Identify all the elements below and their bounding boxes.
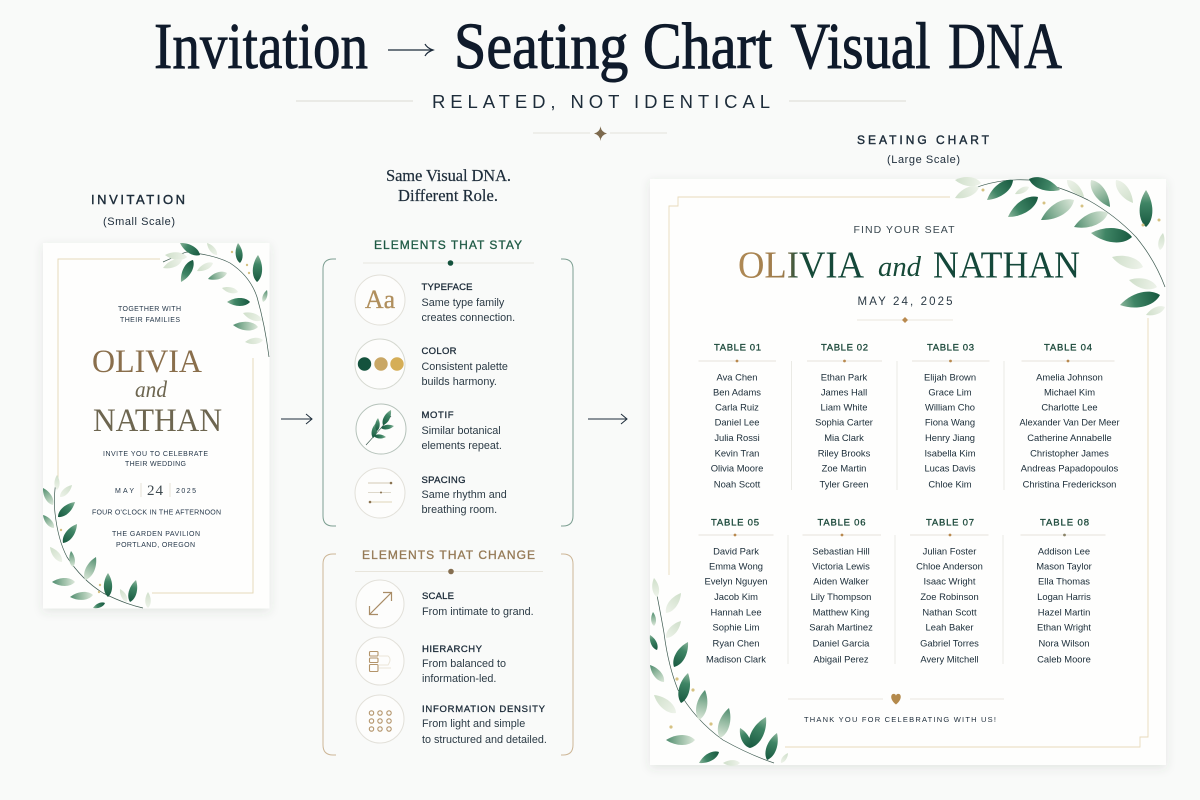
table 01: TABLE 01 — [714, 342, 761, 354]
text: typeface: creates connection. — [422, 312, 515, 324]
text: spacing: SPACING — [422, 475, 466, 486]
text: color: builds harmony. — [422, 376, 497, 388]
names: Olivia and Nathan: and — [878, 252, 922, 283]
table 07: Isaac Wright — [924, 575, 976, 586]
table 08 — [1020, 518, 1106, 664]
table 04 — [1020, 342, 1120, 489]
table 03 — [912, 342, 990, 489]
invitation text: OLIVIA — [92, 344, 202, 380]
table 01: Ava Chen — [716, 371, 758, 382]
text: motif — [422, 410, 502, 452]
text: hierarchy: From balanced to — [422, 658, 506, 670]
invitation text: NATHAN — [93, 403, 222, 439]
invitation text: PORTLAND, OREGON — [116, 542, 195, 549]
heading: elements that stay: ELEMENTS THAT STAY — [374, 238, 522, 252]
table 08: Nora Wilson — [1038, 637, 1090, 648]
title: Visual — [790, 10, 930, 83]
bracket — [323, 259, 573, 526]
icon: scale — [356, 580, 404, 628]
table 01 — [698, 342, 776, 489]
title: Seating Chart — [454, 10, 772, 83]
table 02: Liam White — [821, 401, 867, 412]
table 05: Jacob Kim — [714, 591, 758, 602]
heading: seating chart — [857, 133, 990, 166]
panel: elements that change — [323, 548, 573, 755]
table 02: Tyler Green — [820, 478, 868, 489]
table 06: TABLE 06 — [818, 518, 866, 528]
table 07: Chloe Anderson — [916, 560, 983, 571]
table 05: David Park — [713, 545, 759, 556]
table 02: Sophia Carter — [815, 416, 873, 427]
heading: seating chart: (Large Scale) — [887, 154, 960, 166]
invitation text: and — [135, 377, 167, 402]
icon: heart divider — [788, 694, 1004, 704]
arrow: invitation to center — [281, 414, 312, 424]
title: DNA — [948, 10, 1062, 83]
table 04: Amelia Johnson — [1036, 371, 1103, 382]
invitation text: INVITE YOU TO CELEBRATE — [103, 451, 208, 458]
table 02: Zoe Martin — [822, 462, 866, 473]
table 02: Riley Brooks — [818, 447, 871, 458]
text: hierarchy: HIERARCHY — [422, 644, 483, 655]
botanical corner: top right — [950, 174, 1166, 318]
heading: find your seat: FIND YOUR SEAT — [854, 224, 955, 236]
text: color: Consistent palette — [422, 361, 508, 373]
table 02: TABLE 02 — [821, 342, 868, 354]
text: information density: to structured and detailed. — [422, 734, 547, 746]
table 04: Christina Frederickson — [1023, 478, 1116, 489]
text: spacing: breathing room. — [422, 504, 497, 516]
panel: elements that stay — [323, 238, 573, 526]
table 04: Michael Kim — [1044, 386, 1095, 397]
ornament: star divider — [533, 126, 667, 141]
icon: motif — [356, 404, 406, 454]
text: scale: SCALE — [422, 591, 454, 602]
title: Invitation — [154, 10, 368, 83]
table 05: Emma Wong — [709, 560, 763, 571]
table 06: Victoria Lewis — [812, 560, 870, 571]
table 06: Sebastian Hill — [812, 545, 870, 556]
table 05: Sophie Lim — [713, 621, 760, 632]
text: information density — [422, 704, 547, 746]
text: motif: elements repeat. — [422, 440, 502, 452]
table 04: Catherine Annabelle — [1027, 432, 1112, 443]
panel: invitation card — [40, 240, 269, 610]
table 03: Elijah Brown — [924, 371, 976, 382]
table 05: Ryan Chen — [713, 637, 759, 648]
table 02: Mia Clark — [824, 432, 864, 443]
invitation text: MAY — [115, 488, 134, 495]
invitation text: THEIR FAMILIES — [120, 317, 180, 324]
text: typeface — [422, 282, 515, 324]
table 01: Kevin Tran — [715, 447, 759, 458]
table 06: Daniel Garcia — [813, 637, 870, 648]
names: Olivia and Nathan: OLIVIA — [738, 245, 865, 287]
table 08: Ella Thomas — [1038, 575, 1090, 586]
table 01: Julia Rossi — [714, 432, 760, 443]
table 08: TABLE 08 — [1040, 518, 1089, 528]
invitation text: FOUR O'CLOCK IN THE AFTERNOON — [92, 510, 221, 516]
icon: typeface: Aa — [365, 285, 396, 314]
table 08: Hazel Martin — [1038, 606, 1090, 617]
invitation text: 24 — [147, 483, 164, 499]
text: typeface: Same type family — [422, 297, 505, 309]
heading: invitation: INVITATION — [91, 192, 185, 207]
table 03: Isabella Kim — [924, 447, 976, 458]
table 02: James Hall — [821, 386, 867, 397]
table 06: Lily Thompson — [811, 591, 871, 602]
text: hierarchy — [422, 644, 506, 685]
text: information density: INFORMATION DENSITY — [422, 704, 546, 715]
table 06: Matthew King — [813, 606, 869, 617]
arrow: center to seating chart — [588, 414, 627, 424]
table 01: Ben Adams — [713, 386, 761, 397]
heading: invitation — [91, 192, 185, 228]
icon: color — [355, 339, 405, 389]
table 06: Sarah Martinez — [809, 621, 873, 632]
invitation text: THE GARDEN PAVILION — [112, 531, 200, 538]
botanical corner: top right — [160, 240, 270, 358]
table 01: Olivia Moore — [711, 462, 763, 473]
table 07: Zoe Robinson — [920, 591, 979, 602]
table 05: Madison Clark — [706, 653, 766, 664]
text: spacing — [422, 475, 507, 516]
botanical corner: bottom left — [647, 575, 790, 766]
table 08: Addison Lee — [1038, 545, 1090, 556]
text: motif: Similar botanical — [422, 425, 501, 437]
icon: typeface — [355, 275, 405, 325]
table 07: TABLE 07 — [926, 518, 974, 528]
table 05: TABLE 05 — [711, 518, 759, 528]
table 07: Nathan Scott — [922, 606, 977, 617]
table 01: Carla Ruiz — [715, 401, 759, 412]
heading: same visual DNA — [386, 166, 511, 205]
table 06 — [802, 518, 881, 664]
table 01: Noah Scott — [714, 478, 761, 489]
table 02 — [807, 342, 882, 489]
names: Olivia and Nathan: NATHAN — [933, 245, 1080, 287]
table 05: Hannah Lee — [710, 606, 762, 617]
invitation text: THEIR WEDDING — [125, 461, 186, 468]
table 04: Charlotte Lee — [1041, 401, 1098, 412]
table 07 — [910, 518, 988, 664]
date — [857, 296, 953, 323]
table 07: Leah Baker — [926, 621, 973, 632]
table 03: Grace Lim — [928, 386, 972, 397]
date: MAY 24, 2025 — [858, 296, 952, 308]
text: typeface: TYPEFACE — [422, 282, 472, 293]
table 03: William Cho — [925, 401, 975, 412]
icon: information density — [356, 695, 404, 743]
icon: hierarchy — [356, 637, 404, 685]
text: scale — [422, 591, 534, 618]
table 04: TABLE 04 — [1044, 342, 1092, 354]
table 07: Avery Mitchell — [920, 653, 979, 664]
table 08: Logan Harris — [1037, 591, 1091, 602]
table 05: Evelyn Nguyen — [704, 575, 768, 586]
table 03: Chloe Kim — [928, 478, 972, 489]
text: hierarchy: information-led. — [422, 673, 496, 685]
invitation text — [92, 306, 222, 549]
heading: seating chart: SEATING CHART — [857, 133, 990, 147]
heading: same visual DNA: Same Visual DNA. — [386, 166, 511, 185]
table 06: Abigail Perez — [813, 653, 869, 664]
table 03: Lucas Davis — [924, 462, 976, 473]
text: color — [422, 346, 508, 388]
subtitle: RELATED, NOT IDENTICAL — [432, 91, 770, 112]
table 07: Julian Foster — [923, 545, 976, 556]
text: spacing: Same rhythm and — [422, 489, 507, 501]
table 08: Mason Taylor — [1036, 560, 1092, 571]
botanical corner: bottom left — [40, 475, 152, 610]
names: Olivia and Nathan — [738, 245, 1080, 287]
table 03: Henry Jiang — [925, 432, 975, 443]
table 01: Daniel Lee — [715, 416, 759, 427]
table 05 — [698, 518, 774, 664]
text: color: COLOR — [422, 346, 457, 357]
title — [154, 10, 1062, 83]
table 04: Alexander Van Der Meer — [1020, 416, 1120, 427]
invitation gold frame — [58, 259, 253, 593]
seating chart gold frame — [669, 197, 1148, 747]
table 02: Ethan Park — [821, 371, 867, 382]
table 08: Caleb Moore — [1037, 653, 1091, 664]
text: motif: MOTIF — [422, 410, 454, 421]
bracket — [323, 554, 573, 755]
panel: seating chart card — [647, 174, 1166, 766]
icon: spacing — [355, 468, 405, 518]
heading: elements that change: ELEMENTS THAT CHANGE — [362, 548, 535, 562]
text: information density: From light and simple — [422, 718, 525, 730]
table 06: Aiden Walker — [813, 575, 869, 586]
invitation text: 2025 — [176, 488, 196, 495]
text: thank you: THANK YOU FOR CELEBRATING WITH US! — [804, 715, 996, 724]
heading: invitation: (Small Scale) — [103, 216, 175, 228]
table 04: Andreas Papadopoulos — [1021, 462, 1119, 473]
heading: same visual DNA: Different Role. — [398, 186, 498, 205]
table 08: Ethan Wright — [1037, 621, 1091, 632]
table 03: TABLE 03 — [927, 342, 974, 354]
table 04: Christopher James — [1030, 447, 1109, 458]
text: scale: From intimate to grand. — [422, 606, 534, 618]
table 03: Fiona Wang — [925, 416, 975, 427]
table 07: Gabriel Torres — [920, 637, 979, 648]
invitation text: TOGETHER WITH — [118, 306, 181, 313]
